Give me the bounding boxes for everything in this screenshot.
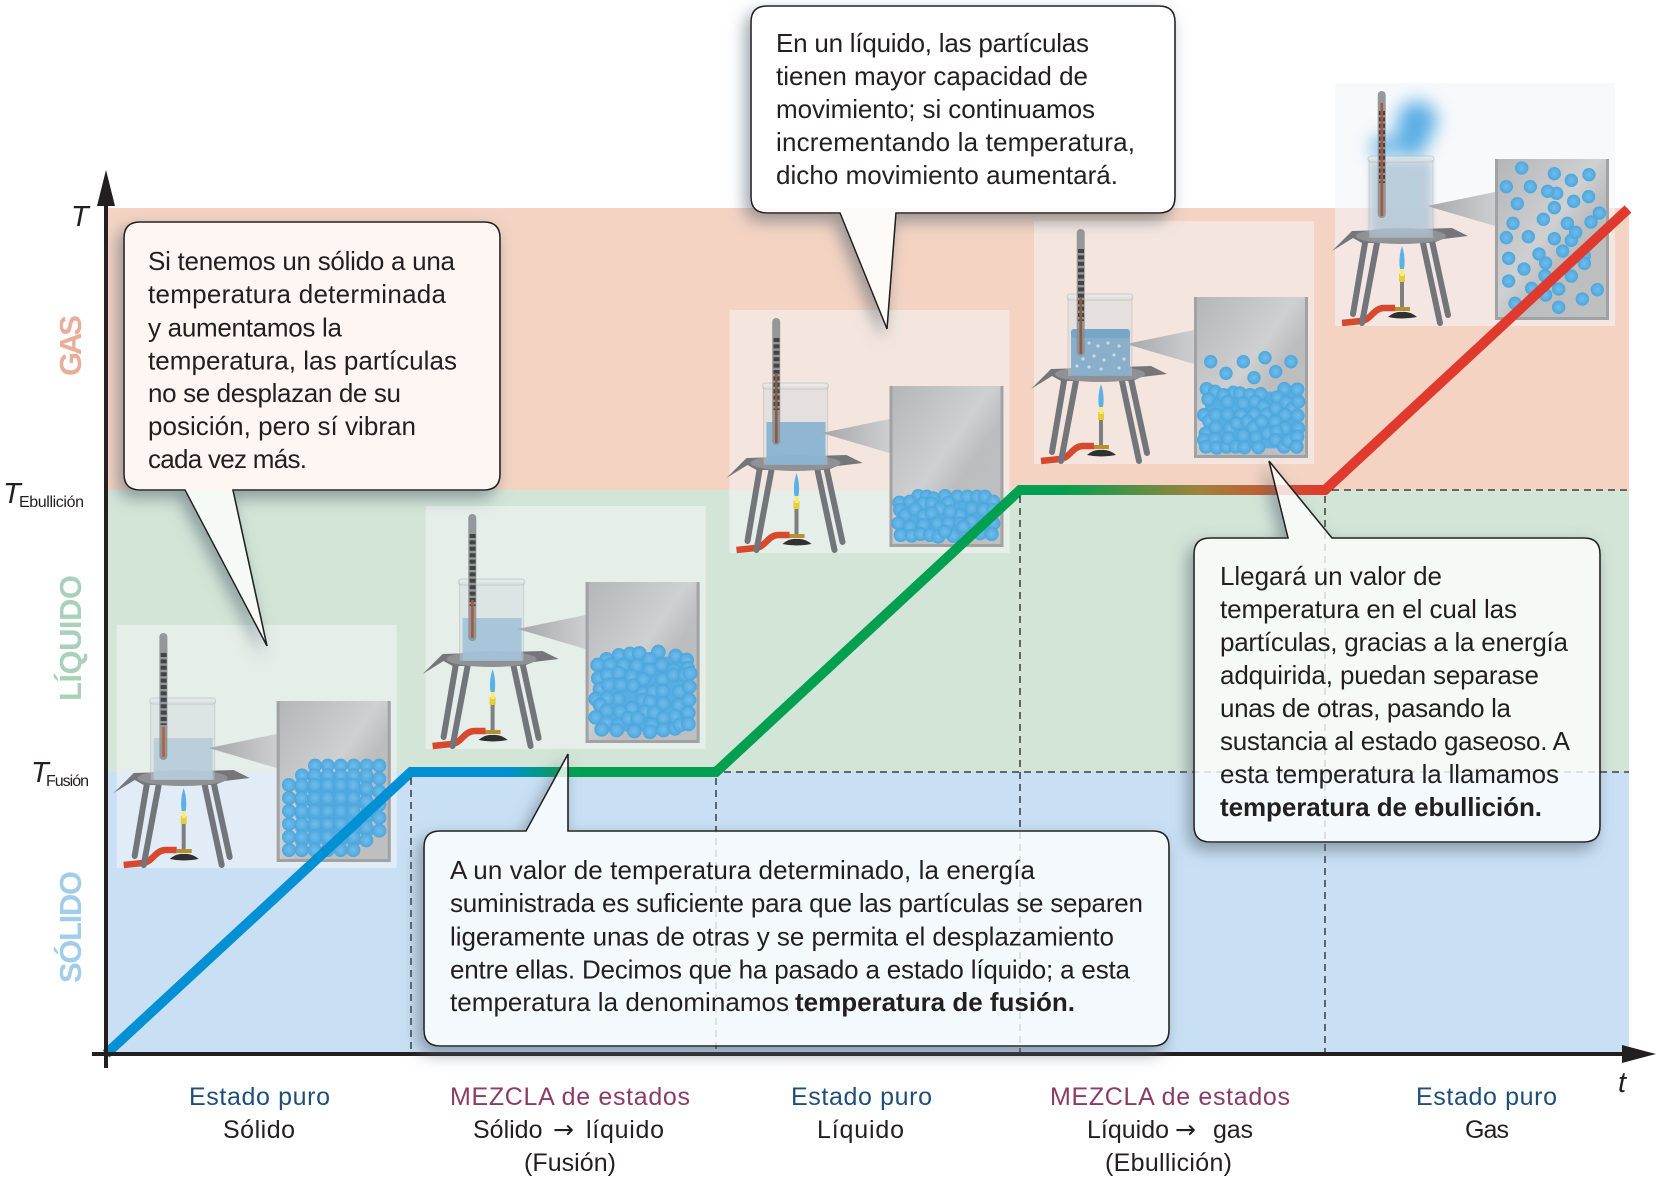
callout: boiling temperature: temperatura en el cual las [1220, 594, 1517, 624]
column label: melting mixture: líquido [586, 1116, 664, 1144]
callout: boiling temperature: partículas, gracias a la energía [1220, 627, 1569, 657]
panel: gas illustration [1332, 83, 1615, 326]
callout: solid particles: no se desplazan de su [148, 378, 401, 408]
column label: boiling mixture: gas [1213, 1116, 1253, 1144]
panel: melting illustration [423, 506, 706, 749]
steam cloud [1372, 101, 1437, 158]
column label: pure solid [189, 1083, 330, 1144]
callout: solid particles: posición, pero sí vibran [148, 411, 416, 441]
particles: mixed solid and liquid [588, 645, 697, 739]
column label: boiling mixture: Líquido [1087, 1116, 1169, 1144]
axis label: T Ebullición [3, 478, 84, 511]
axis label: T Fusión: T [31, 757, 51, 789]
column label: boiling mixture: (Ebullición) [1105, 1149, 1232, 1177]
column label: melting mixture [450, 1083, 690, 1177]
column label: melting mixture: (Fusión) [524, 1149, 616, 1177]
callout: boiling temperature: sustancia al estado gaseoso. A [1220, 726, 1571, 756]
column label: boiling mixture [1050, 1083, 1290, 1177]
callout: solid particles [124, 222, 500, 646]
axis label: T: T [71, 201, 91, 233]
column label: pure gas: Estado puro [1416, 1083, 1557, 1111]
axis: time [92, 1045, 1656, 1063]
column label: melting mixture: → [553, 1115, 574, 1144]
callout: boiling temperature: unas de otras, pasando la [1220, 693, 1512, 723]
callout: melting temperature: A un valor de temperatura determinado, la energía [450, 855, 1036, 885]
callout: solid particles: y aumentamos la [148, 312, 343, 342]
callout: boiling temperature: adquirida, puedan separase [1220, 660, 1539, 690]
callout: solid particles: cada vez más. [148, 444, 307, 474]
panel: solid illustration [114, 625, 397, 868]
callout: melting temperature: temperatura de fusión. [795, 987, 1075, 1017]
callout: solid particles: temperatura, las partículas [148, 346, 457, 376]
callout: liquid movement: incrementando la temperatura, [776, 127, 1135, 157]
column label: melting mixture: MEZCLA de estados [450, 1083, 690, 1111]
column label: pure liquid: Estado puro [791, 1083, 932, 1111]
axis label: t: t [1618, 1067, 1628, 1099]
callout: melting temperature: temperatura la denominamos [450, 987, 789, 1017]
band: solid [106, 772, 1629, 1054]
callout: boiling temperature: temperatura de ebullición. [1220, 792, 1542, 822]
column label: pure liquid [791, 1083, 932, 1144]
callout: liquid movement: movimiento; si continuamos [776, 94, 1095, 124]
axis label: T Fusión [31, 757, 89, 790]
panel: liquid illustration [726, 310, 1010, 553]
callout: liquid movement [751, 6, 1175, 329]
callout: liquid movement: tienen mayor capacidad de [776, 61, 1088, 91]
callout: liquid movement: En un líquido, las partículas [776, 28, 1089, 58]
callout: boiling temperature [1194, 461, 1600, 842]
label: SÓLIDO: SÓLIDO [52, 871, 88, 983]
axis label: T Ebullición: Ebullición [19, 494, 84, 511]
band: liquid [106, 490, 1629, 772]
callout: melting temperature: suministrada es suficiente para que las partículas se separen [450, 888, 1143, 918]
axis label: T Ebullición: T [3, 478, 23, 510]
callout: solid particles: Si tenemos un sólido a una [148, 246, 456, 276]
band: gas [106, 208, 1629, 490]
column label: pure solid: Sólido [223, 1116, 295, 1144]
column label: boiling mixture: → [1175, 1115, 1196, 1144]
callout: melting temperature [424, 754, 1169, 1046]
heating curve [106, 209, 1628, 1054]
column label: pure gas: Gas [1465, 1116, 1509, 1144]
axis: temperature [97, 170, 115, 1068]
callout: solid particles: temperatura determinada [148, 279, 447, 309]
label: LÍQUIDO: LÍQUIDO [53, 575, 88, 701]
callout: melting temperature: entre ellas. Decimos que ha pasado a estado líquido; a esta [450, 954, 1131, 984]
callout: boiling temperature: esta temperatura la llamamos [1220, 759, 1559, 789]
label: GAS: GAS [53, 315, 88, 376]
particles: liquid [891, 489, 1000, 544]
column label: pure gas [1416, 1083, 1557, 1144]
axis label: T Fusión: Fusión [46, 773, 89, 790]
column label: boiling mixture: MEZCLA de estados [1050, 1083, 1290, 1111]
particles: liquid and gas mix [1197, 351, 1305, 455]
column label: pure liquid: Líquido [817, 1116, 904, 1144]
particles: solid lattice [282, 759, 386, 857]
callout: boiling temperature: Llegará un valor de [1220, 561, 1442, 591]
bubbles in boiling liquid [1075, 341, 1126, 371]
callout: liquid movement: dicho movimiento aumentará. [776, 160, 1118, 190]
panel: boiling illustration [1031, 221, 1314, 464]
column label: melting mixture: Sólido [473, 1116, 542, 1144]
callout: melting temperature: ligeramente unas de otras y se permita el desplazamiento [450, 922, 1114, 952]
particles: gas [1500, 161, 1606, 314]
column label: pure solid: Estado puro [189, 1083, 330, 1111]
